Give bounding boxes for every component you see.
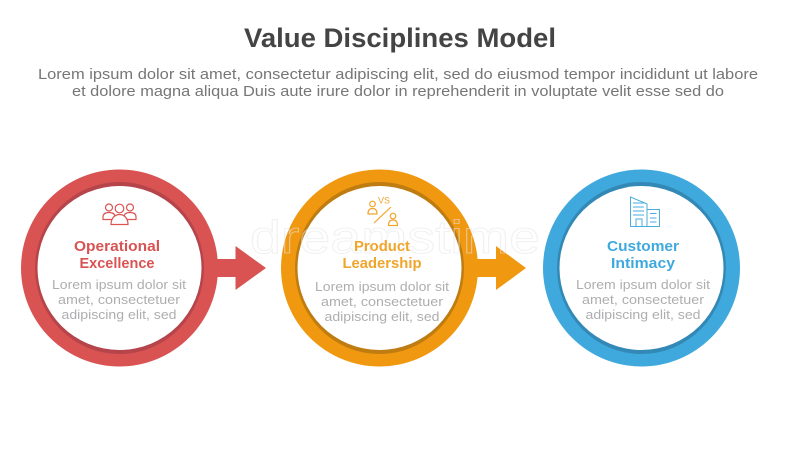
icon: office buildings	[630, 197, 660, 226]
panel: customer intimacy	[543, 170, 740, 366]
subtitle text	[38, 66, 758, 100]
heading: operational excellence: Excellence	[80, 256, 154, 272]
body text: operational excellence: amet, consectetuer	[58, 292, 181, 307]
panel: operational excellence	[21, 170, 218, 366]
arrow: red to orange	[214, 246, 266, 290]
body text: customer intimacy: adipiscing elit, sed	[586, 307, 700, 322]
icon: person versus person	[368, 201, 398, 226]
body text: customer intimacy: Lorem ipsum dolor sit	[576, 277, 710, 292]
arrow: orange to blue	[474, 246, 526, 290]
body text: operational excellence: Lorem ipsum dolor sit	[52, 277, 186, 292]
body text: product leadership: adipiscing elit, sed	[324, 309, 440, 324]
heading: customer intimacy: Customer	[607, 239, 679, 255]
body text: product leadership: Lorem ipsum dolor sit	[315, 279, 449, 294]
heading: customer intimacy: Intimacy	[611, 256, 675, 272]
subtitle text: et dolore magna aliqua Duis aute irure dolor in reprehenderit in voluptate velit esse sed do	[72, 83, 724, 100]
body text: customer intimacy: amet, consectetuer	[582, 292, 705, 307]
body text: product leadership: amet, consectetuer	[321, 294, 444, 309]
heading: operational excellence: Operational	[74, 239, 160, 255]
body text: operational excellence: adipiscing elit, sed	[62, 307, 176, 322]
heading: product leadership: Product	[354, 239, 410, 255]
heading: product leadership: Leadership	[342, 256, 422, 272]
title: Value Disciplines Model	[244, 23, 556, 53]
icon: team of people	[103, 204, 136, 224]
icon label: vs: VS	[378, 196, 390, 206]
watermark: dreamstime	[250, 211, 540, 263]
subtitle text: Lorem ipsum dolor sit amet, consectetur adipiscing elit, sed do eiusmod tempor incididunt ut labore	[38, 66, 758, 83]
panel: product leadership	[250, 170, 540, 366]
